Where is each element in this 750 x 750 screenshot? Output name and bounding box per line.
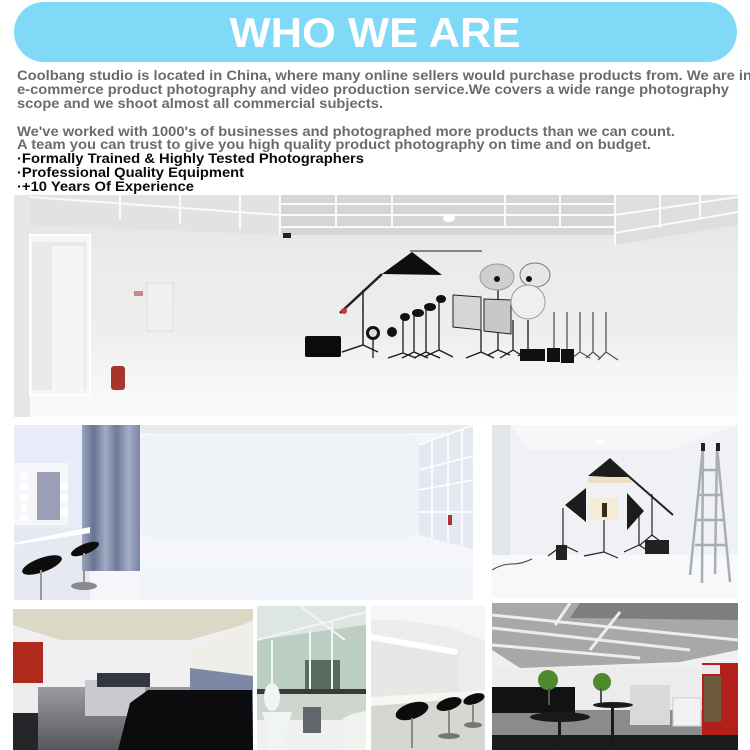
sofa [118,690,253,750]
photo: white cyclorama with makeup mirror [14,425,473,600]
curtain [82,425,140,571]
text block: studio introduction: We've worked with 1000's of businesses and photographed more products than we can count. [17,123,675,139]
softbox and boom arm [340,252,442,352]
stools [20,539,101,600]
text block: key strengths: ·Formally Trained & Highly Tested Photographers [17,150,364,166]
plants [538,670,611,705]
text block: key strengths [17,150,364,194]
freezer [673,698,701,726]
softboxes [565,458,673,530]
equipment case [305,336,341,357]
photo: main studio with lighting equipment [14,195,738,417]
photo: lounge with black sofa [13,609,253,750]
banner [14,2,737,62]
lights on tripods [373,290,618,360]
stools [393,691,486,724]
photo: lounge with tables and fridge [492,603,738,750]
glass window wall [419,425,473,549]
drinks fridge [702,663,738,735]
text block: key strengths: ·Professional Quality Equipment [17,164,244,180]
text block: studio introduction: scope and we shoot almost all commercial subjects. [17,95,383,111]
softboxes and umbrellas [453,263,550,334]
mirror [14,463,68,525]
tables [530,702,633,750]
text block: studio introduction: A team you can trust to give you high quality product photography on time and on budget. [17,136,651,152]
text block: studio introduction: Coolbang studio is located in China, where many online sellers would purchase products from. We are in [17,67,750,83]
text block: studio introduction [17,67,750,152]
text block: key strengths: ·+10 Years Of Experience [17,178,194,194]
photo: washroom [257,606,366,750]
photo: makeup room [370,606,486,750]
ladder [690,447,730,583]
photo: studio set with softboxes and ladder [492,425,738,598]
title: WHO WE ARE [230,9,520,56]
counter [14,527,90,545]
text block: studio introduction: e-commerce product photography and video production service.We covers a wide range photography [17,81,729,97]
